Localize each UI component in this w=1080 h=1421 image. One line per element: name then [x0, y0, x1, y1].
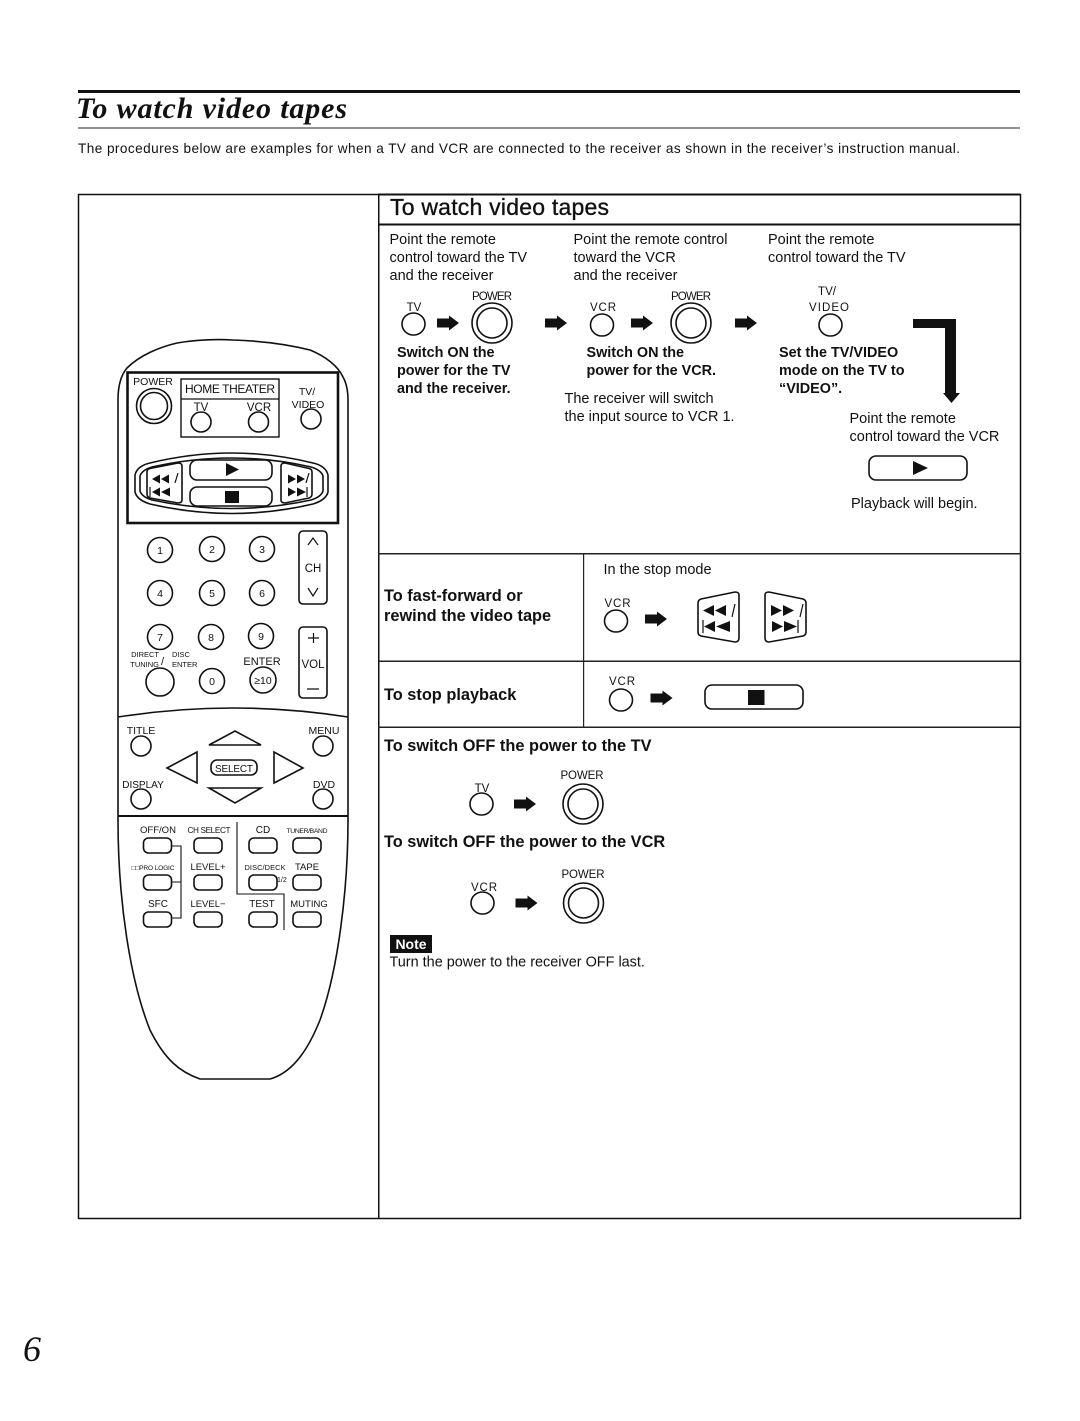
- button: fast-forward: [765, 592, 806, 642]
- step 1 result: Switch ON the: [397, 345, 495, 361]
- number keypad: TUNING: [130, 660, 159, 669]
- number keypad: DIRECT: [131, 650, 159, 659]
- audio function buttons: DISC/DECK: [244, 863, 286, 872]
- step 2 instruction: Point the remote control: [574, 232, 727, 248]
- step 3 instruction: control toward the TV: [768, 250, 906, 266]
- panel heading: To watch video tapes: [390, 194, 609, 220]
- menu navigation buttons: [122, 725, 339, 809]
- step 2 note: the input source to VCR 1.: [564, 409, 735, 425]
- menu navigation buttons: SELECT: [215, 764, 253, 775]
- volume rocker: [299, 627, 327, 698]
- stop mode text: In the stop mode: [604, 562, 712, 578]
- power button: [133, 376, 173, 424]
- page title: To watch video tapes: [76, 92, 347, 125]
- number keypad: ENTER: [172, 660, 198, 669]
- volume rocker: VOL: [301, 659, 325, 671]
- button: power: [671, 291, 711, 343]
- step 1 instruction: Point the remote: [390, 232, 496, 248]
- button: power: POWER: [562, 869, 604, 881]
- step 2 note: [564, 391, 735, 425]
- highlighted button box: [128, 372, 338, 523]
- button: VCR: [609, 676, 635, 711]
- number keypad: 8: [208, 632, 214, 644]
- step 2 note: The receiver will switch: [564, 391, 714, 407]
- step 3 result: Set the TV/VIDEO: [779, 345, 898, 361]
- menu navigation buttons: MENU: [309, 725, 339, 737]
- header underline: [78, 128, 1020, 129]
- button: TV: [470, 783, 493, 815]
- button: VCR: [590, 302, 616, 336]
- number keypad: [130, 536, 281, 696]
- panel: switch off TV: [384, 737, 652, 824]
- step 2 instruction: and the receiver: [574, 268, 678, 284]
- arrow: [545, 316, 567, 330]
- button: VCR: VCR: [609, 676, 635, 688]
- step 3 result: “VIDEO”.: [779, 381, 842, 397]
- audio function buttons: LEVEL−: [190, 899, 226, 910]
- number keypad: ENTER: [243, 656, 281, 668]
- TV/VIDEO button: [292, 386, 324, 429]
- power button: POWER: [133, 376, 173, 388]
- step 1 instruction: control toward the TV: [390, 250, 527, 266]
- TV/VIDEO button: VIDEO: [292, 399, 324, 411]
- button: TV/VIDEO: TV/: [818, 286, 837, 298]
- panel: switch off VCR: [384, 833, 665, 923]
- row label: To stop playback: [384, 686, 517, 704]
- number keypad: 7: [157, 632, 163, 644]
- button: TV: [402, 302, 425, 335]
- button: power: POWER: [560, 770, 604, 782]
- button: TV/VIDEO: VIDEO: [809, 302, 849, 314]
- TV/VIDEO button: TV/: [299, 386, 315, 398]
- audio function buttons: TUNER/BAND: [286, 828, 328, 835]
- button: power: [472, 291, 512, 343]
- step 1 result: [397, 345, 511, 397]
- note badge: Note: [395, 936, 427, 952]
- arrow: [650, 690, 672, 706]
- note badge: [390, 935, 432, 953]
- audio function buttons: TAPE: [295, 862, 319, 873]
- number keypad: 4: [157, 588, 163, 600]
- audio function buttons: SFC: [148, 899, 168, 910]
- channel rocker: [299, 531, 327, 604]
- number keypad: /: [161, 656, 165, 668]
- channel rocker: CH: [305, 563, 321, 575]
- number keypad: 0: [209, 676, 215, 688]
- step 3 instruction: [768, 232, 906, 266]
- button: power: POWER: [472, 291, 512, 303]
- button: TV: TV: [475, 783, 490, 795]
- number keypad: DISC: [172, 650, 191, 659]
- step 2 instruction: [574, 232, 727, 284]
- play button: [869, 456, 967, 480]
- arrow: [631, 316, 653, 330]
- home theater box: [181, 379, 279, 437]
- note: [390, 935, 645, 970]
- arrow: [735, 316, 757, 330]
- stop button: [705, 685, 803, 709]
- step 4 instruction: [850, 411, 999, 445]
- heading: To switch OFF the power to the VCR: [384, 833, 665, 851]
- menu navigation buttons: DVD: [313, 779, 336, 791]
- arrow: [516, 896, 538, 910]
- number keypad: 1: [157, 545, 163, 557]
- audio function buttons: LEVEL+: [190, 862, 226, 873]
- step 2 instruction: toward the VCR: [574, 250, 676, 266]
- step 2 result: Switch ON the: [586, 345, 684, 361]
- intro text: The procedures below are examples for when a TV and VCR are connected to the receiver as shown in the receiver’s instruction manual.: [78, 141, 960, 156]
- note text: Turn the power to the receiver OFF last.: [390, 954, 645, 970]
- audio function buttons: 1/2: [277, 877, 287, 884]
- button: power: POWER: [671, 291, 711, 303]
- heading: To switch OFF the power to the TV: [384, 737, 652, 755]
- number keypad: 9: [258, 631, 264, 643]
- button: VCR: VCR: [590, 302, 616, 314]
- home theater box: VCR: [247, 402, 271, 414]
- playback text: Playback will begin.: [851, 496, 978, 512]
- step 1 instruction: and the receiver: [390, 268, 494, 284]
- page number: 6: [23, 1329, 41, 1369]
- audio function buttons: CH SELECT: [188, 826, 230, 835]
- button: power: [560, 770, 604, 824]
- step 1 result: and the receiver.: [397, 381, 511, 397]
- step 4 instruction: Point the remote: [850, 411, 956, 427]
- number keypad: 5: [209, 588, 215, 600]
- audio function buttons: CD: [256, 825, 270, 836]
- button: rewind: [698, 592, 739, 642]
- row label: rewind the video tape: [384, 607, 551, 625]
- button: TV/VIDEO: [809, 286, 849, 336]
- menu navigation buttons: TITLE: [127, 725, 155, 737]
- remote body outline: [118, 340, 348, 1079]
- step 2 result: power for the VCR.: [586, 363, 716, 379]
- button: VCR: VCR: [604, 598, 630, 610]
- step 3 result: [779, 345, 905, 397]
- arrow: [645, 612, 667, 626]
- number keypad: ≥10: [254, 675, 272, 687]
- number keypad: 3: [259, 544, 265, 556]
- step 1 result: power for the TV: [397, 363, 511, 379]
- step 2 result: [586, 345, 716, 379]
- step 3 instruction: Point the remote: [768, 232, 874, 248]
- step 4 instruction: control toward the VCR: [850, 429, 999, 445]
- horizontal body divider: [118, 815, 348, 817]
- transport controls: [135, 453, 328, 514]
- page header rule: [78, 90, 1020, 93]
- home theater box: TV: [194, 402, 209, 414]
- panel: fast-forward or rewind: [384, 562, 806, 642]
- main frame: [78, 194, 1020, 1218]
- row label: [384, 587, 551, 625]
- button: TV: TV: [407, 302, 422, 314]
- row label: To fast-forward or: [384, 587, 523, 605]
- audio function buttons: [132, 822, 328, 930]
- panel: remote control: [118, 340, 348, 1079]
- button: VCR: [604, 598, 630, 632]
- button: VCR: VCR: [471, 882, 497, 894]
- audio function buttons: □□PRO LOGIC: [132, 865, 175, 872]
- audio function buttons: TEST: [249, 899, 275, 910]
- button: VCR: [471, 882, 497, 914]
- arrow: [437, 316, 459, 330]
- number keypad: 6: [259, 588, 265, 600]
- panel: stop playback: [384, 676, 803, 711]
- step 3 result: mode on the TV to: [779, 363, 905, 379]
- elbow arrow down: [913, 319, 960, 403]
- step 1 instruction: [390, 232, 527, 284]
- audio function buttons: OFF/ON: [140, 825, 176, 836]
- number keypad: 2: [209, 544, 215, 556]
- panel: to watch video tapes steps: [390, 194, 999, 512]
- home theater box: HOME THEATER: [185, 382, 275, 396]
- body divider arc: [118, 708, 348, 717]
- audio function buttons: MUTING: [290, 899, 328, 910]
- arrow: [514, 796, 536, 812]
- button: power: [562, 869, 604, 923]
- menu navigation buttons: DISPLAY: [122, 780, 164, 791]
